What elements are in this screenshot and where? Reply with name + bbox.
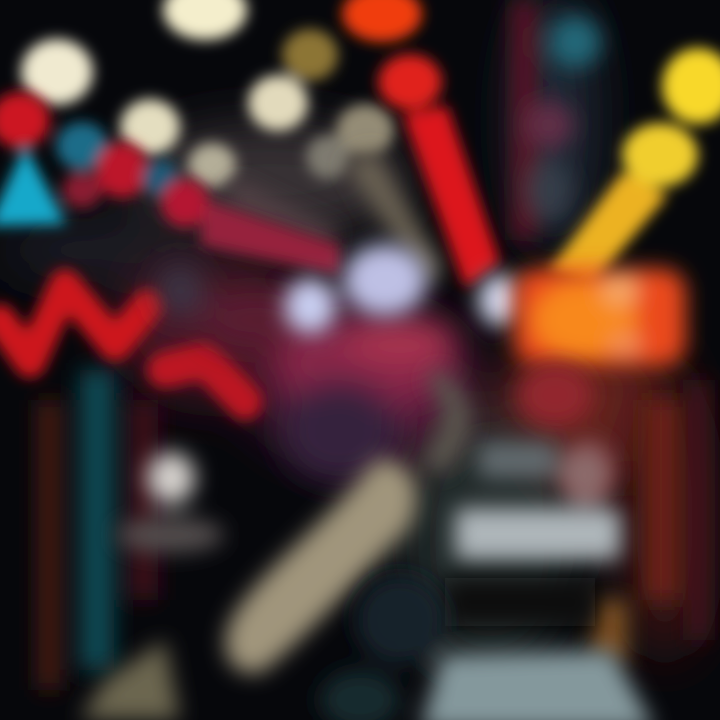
dark band — [445, 578, 595, 626]
dim beige streak below orbs — [225, 150, 445, 285]
upper left red and blue lights — [0, 92, 340, 275]
dim red lower right patches — [517, 363, 614, 502]
beige diagonal streak — [80, 370, 470, 720]
orange glow blob — [514, 268, 686, 366]
bottom teal grey panel — [320, 575, 655, 720]
cream light orbs — [21, 0, 394, 187]
yellow orbs and streak — [548, 48, 720, 285]
white lavender highlights — [284, 244, 522, 334]
small white glow and grey band — [116, 452, 224, 553]
red zigzag line — [0, 285, 245, 402]
white stripes — [455, 442, 621, 560]
red streak and orange orb — [342, 0, 500, 288]
central purple and red tube — [158, 264, 455, 482]
